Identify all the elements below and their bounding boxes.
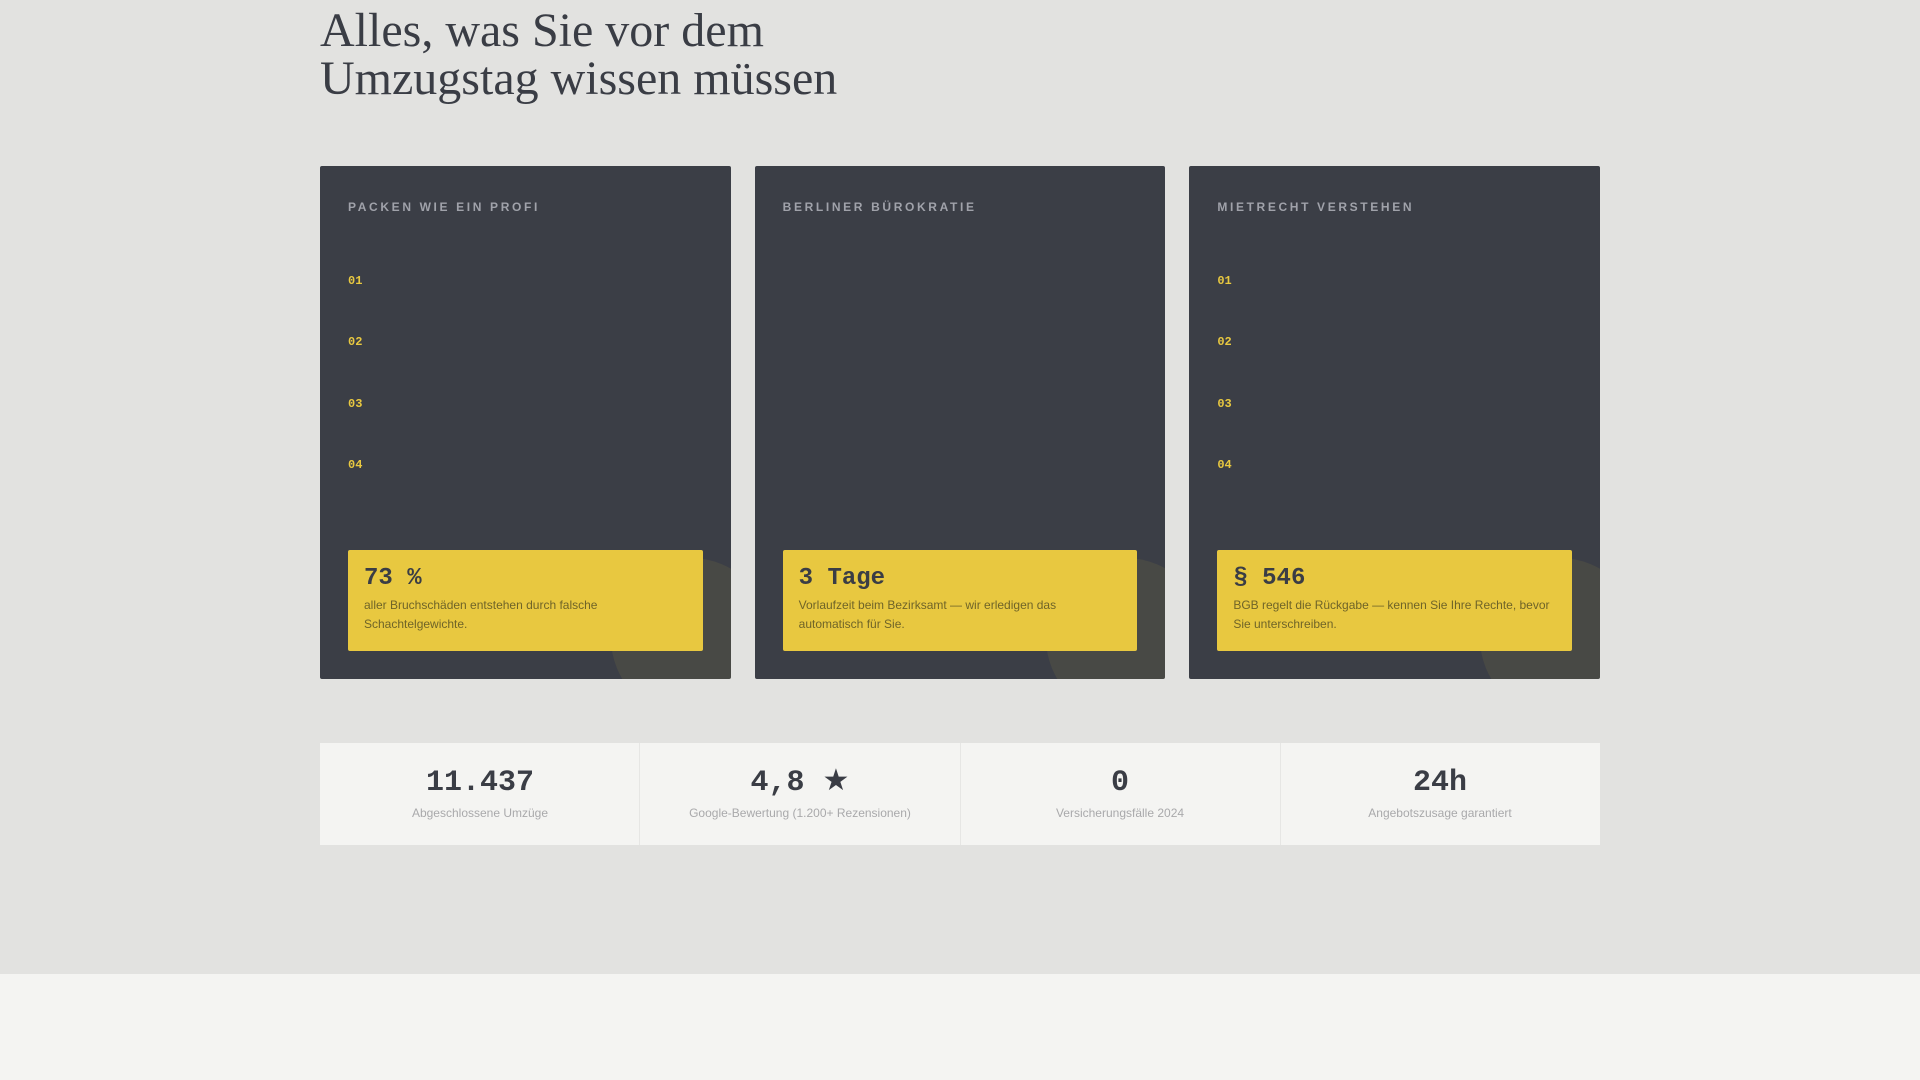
list number 01: 01	[348, 274, 362, 288]
footer band	[0, 974, 1920, 1080]
list number 03: 03	[1217, 397, 1232, 411]
stat value: 0	[1111, 766, 1129, 800]
callout text: aller Bruchschäden entstehen durch falsche Schachtelgewichte.	[364, 598, 597, 631]
callout: § 546	[1217, 550, 1572, 651]
stat label: Google-Bewertung (1.200+ Rezensionen)	[689, 806, 911, 820]
panel: Mietrecht verstehen	[1189, 166, 1600, 679]
stat: completed moves	[412, 766, 548, 820]
stat label: Abgeschlossene Umzüge	[412, 806, 548, 820]
decorative circle	[1046, 558, 1206, 718]
list number 02: 02	[348, 335, 362, 349]
callout figure: § 546	[1233, 565, 1305, 592]
panel heading: MIETRECHT VERSTEHEN	[1217, 200, 1414, 214]
title: Alles, was Sie vor dem	[320, 4, 764, 56]
callout text: Vorlaufzeit beim Bezirksamt — wir erledigen das automatisch für Sie.	[799, 598, 1056, 631]
panel: Berliner Bürokratie	[755, 166, 1165, 679]
title: Umzugstag wissen müssen	[320, 52, 837, 104]
stat label: Angebotszusage garantiert	[1368, 806, 1512, 820]
list number 02: 02	[1217, 335, 1232, 349]
callout: 73 %	[348, 550, 703, 651]
panel heading: PACKEN WIE EIN PROFI	[348, 200, 540, 214]
list number 04: 04	[1217, 458, 1232, 472]
panel heading: BERLINER BÜROKRATIE	[783, 200, 977, 214]
callout text: BGB regelt die Rückgabe — kennen Sie Ihre Rechte, bevor Sie unterschreiben.	[1233, 598, 1550, 631]
list number 04: 04	[348, 458, 362, 472]
stat value: 24h	[1413, 766, 1467, 800]
list number 01: 01	[1217, 274, 1232, 288]
decorative circle	[1480, 558, 1640, 718]
stat value: 11.437	[426, 766, 534, 800]
list number 03: 03	[348, 397, 362, 411]
stat: Google rating	[689, 766, 911, 820]
callout: 3 Tage	[783, 550, 1137, 651]
stat value: 4,8 ★	[751, 766, 849, 800]
title	[320, 4, 837, 104]
stats bar	[320, 743, 1600, 845]
decorative circle	[611, 558, 771, 718]
callout figure: 73 %	[364, 565, 422, 592]
stat: insurance claims	[1056, 766, 1184, 820]
stat: offer guarantee	[1368, 766, 1512, 820]
panel: Packen wie ein Profi	[320, 166, 731, 679]
callout figure: 3 Tage	[799, 565, 885, 592]
stat label: Versicherungsfälle 2024	[1056, 806, 1184, 820]
